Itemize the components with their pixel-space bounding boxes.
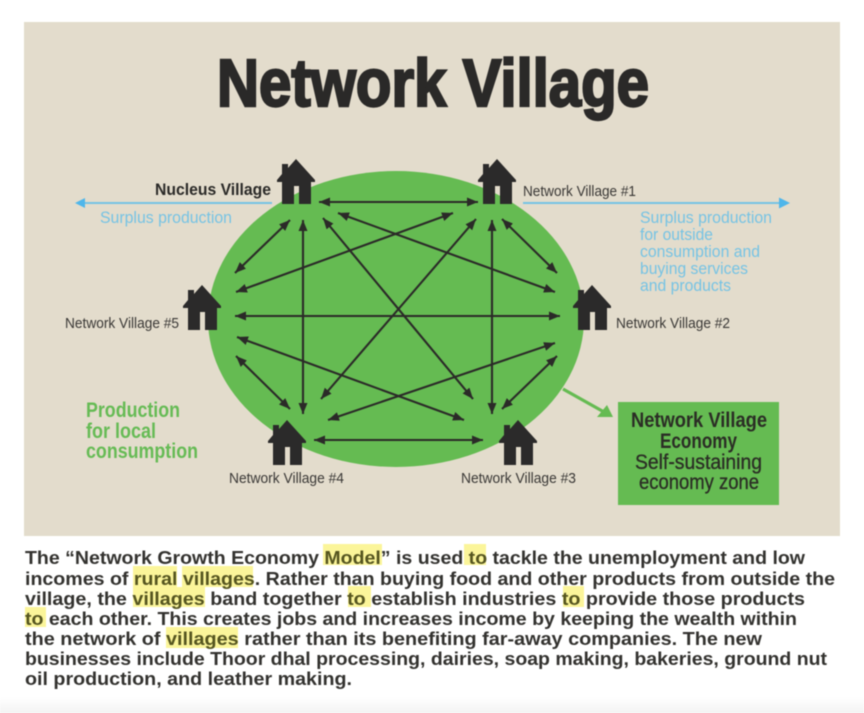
label: Network Village 2: Network Village #2 [616, 316, 730, 332]
callout: Network Village Economy: Self-sustaining [635, 450, 762, 474]
label: Network Village 1: Network Village #1 [523, 184, 636, 200]
icon: house, Network Village 4 [268, 420, 306, 465]
text block: description with highlighted words: to each other. This creates jobs and increases income by keeping the wealth within [25, 608, 797, 629]
callout: Network Village Economy: Network Village [631, 408, 767, 432]
text: surplus production right: consumption and [640, 242, 760, 261]
network arrows [235, 202, 560, 440]
callout: Network Village Economy [618, 402, 779, 505]
arrow: ellipse to economy box [563, 389, 613, 417]
text: production for local consumption: consumption [86, 440, 198, 463]
title: Network Village [217, 46, 649, 121]
text: surplus production left: Surplus production [100, 208, 232, 227]
icon: house, Network Village 5 [183, 285, 221, 330]
icon: house, Network Village 1 [478, 159, 516, 204]
text block: description with highlighted words: village, the villages band together to establish industries to provide those products [25, 588, 805, 609]
text: production for local consumption: for local [86, 420, 156, 443]
label: Network Village 3: Network Village #3 [461, 471, 576, 487]
text: production for local consumption [86, 399, 198, 463]
callout: Network Village Economy: Economy [660, 429, 737, 453]
text block: description with highlighted words: the network of villages rather than its benefiting far-away companies. The new [25, 628, 763, 649]
green economy ellipse [208, 171, 584, 467]
text block: description with highlighted words: businesses include Thoor dhal processing, dairies, soap making, bakeries, ground nut [25, 648, 827, 669]
text: surplus production right [640, 208, 772, 295]
text: surplus production right: Surplus production [640, 208, 772, 227]
text: production for local consumption: Production [86, 399, 180, 422]
label: Network Village 4: Network Village #4 [229, 471, 344, 487]
text block: description with highlighted words: incomes of rural villages . Rather than buying food and other products from outside the [25, 568, 835, 589]
text: surplus production right: and products [640, 276, 731, 295]
icon: house, Network Village 3 [499, 420, 537, 465]
text: surplus production right: for outside [640, 225, 713, 244]
label: Nucleus Village: Nucleus Village [155, 180, 271, 199]
arrow: surplus outflow right [523, 198, 790, 208]
icon: house, Nucleus Village [277, 159, 315, 204]
text block: description with highlighted words [25, 544, 835, 689]
text: surplus production right: buying services [640, 259, 748, 278]
text block: description with highlighted words: The “Network Growth Economy Model” is used to tackle the unemployment and low [25, 547, 806, 568]
icon: house, Network Village 2 [573, 285, 611, 330]
arrow: surplus outflow left [75, 198, 272, 208]
panel: diagram background [24, 22, 840, 536]
text block: description with highlighted words: oil production, and leather making. [25, 668, 352, 689]
callout: Network Village Economy: economy zone [639, 470, 759, 494]
label: Network Village 5: Network Village #5 [65, 316, 179, 332]
